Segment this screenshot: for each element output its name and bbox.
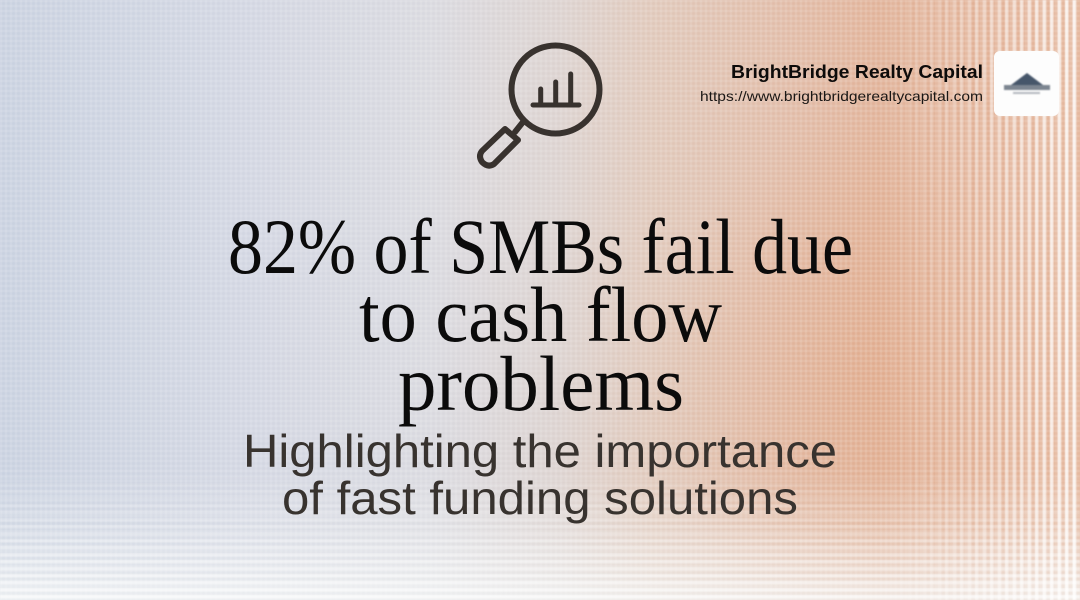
subtitle (243, 425, 837, 524)
title: to cash flow (359, 271, 722, 358)
company name: BrightBridge Realty Capital (731, 62, 983, 82)
logo badge (994, 51, 1059, 116)
title: problems (398, 340, 684, 427)
title: 82% of SMBs fail due (228, 203, 853, 290)
icon: magnifying glass with bar chart (480, 46, 600, 166)
subtitle: of fast funding solutions (282, 472, 798, 524)
title (228, 203, 853, 427)
subtitle: Highlighting the importance (243, 425, 837, 477)
company website: https://www.brightbridgerealtycapital.com (700, 88, 983, 104)
